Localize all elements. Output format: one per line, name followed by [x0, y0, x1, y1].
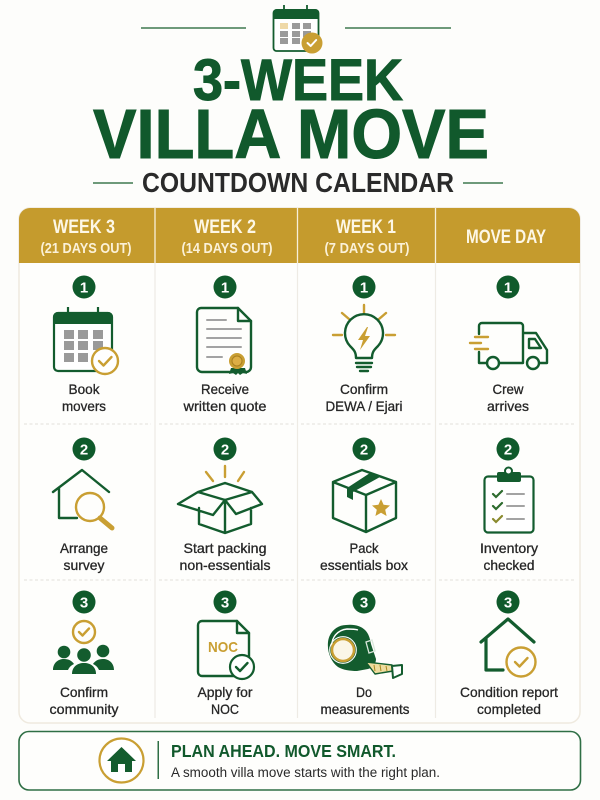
label — [320, 684, 410, 717]
label — [198, 684, 253, 717]
label: Start packing — [184, 540, 266, 556]
icon: tape measure — [328, 625, 402, 678]
task: start packing — [178, 438, 270, 573]
panel: calendar table — [19, 208, 580, 723]
task: do measurements — [320, 590, 410, 717]
heading: week 1: WEEK 1 — [336, 217, 396, 238]
task: inventory checked — [480, 438, 538, 573]
label: measurements — [320, 701, 410, 717]
label — [480, 540, 538, 573]
label: non-essentials — [180, 557, 270, 573]
icon: clipboard checklist — [484, 468, 534, 532]
task: start packing: 2 — [221, 442, 229, 458]
heading: week 1: (7 DAYS OUT) — [324, 240, 410, 257]
label: Condition report — [460, 684, 558, 700]
label: Arrange — [60, 540, 108, 556]
icon: light bulb — [333, 305, 395, 371]
label: essentials box — [320, 557, 408, 573]
icon: NOC document: NOC — [208, 639, 238, 656]
label: movers — [62, 398, 106, 414]
icon: document with seal — [197, 308, 251, 375]
task: arrange survey: 2 — [80, 442, 88, 458]
label: community — [50, 701, 118, 717]
label: checked — [484, 557, 534, 573]
label: Crew — [492, 381, 524, 397]
task: apply for NOC: 3 — [221, 594, 229, 612]
title: VILLA MOVE: VILLA MOVE — [93, 95, 489, 173]
icon: community with check — [53, 621, 114, 674]
heading: week 3: WEEK 3 — [53, 217, 115, 238]
icon: house in gold circle — [100, 738, 144, 782]
task: inventory checked: 2 — [504, 442, 512, 458]
heading: week 3 — [40, 217, 132, 257]
label — [62, 381, 106, 414]
task: condition report completed — [460, 590, 558, 717]
task: book movers — [53, 276, 118, 414]
task: book movers: 1 — [80, 280, 88, 296]
heading: move day: MOVE DAY — [466, 227, 546, 248]
label — [487, 381, 529, 414]
title: 3-WEEK: 3-WEEK — [193, 48, 403, 113]
label — [60, 540, 108, 573]
label — [50, 684, 118, 717]
icon: sealed box with star — [333, 470, 396, 532]
subtitle: COUNTDOWN CALENDAR: COUNTDOWN CALENDAR — [142, 167, 454, 198]
divider — [158, 741, 159, 779]
task: pack essentials box: 2 — [360, 442, 368, 458]
label — [182, 381, 267, 414]
label: Confirm — [340, 381, 388, 397]
label: survey — [64, 557, 104, 573]
tagline: A smooth villa move starts with the right plan. — [171, 765, 440, 780]
icon: house with check — [481, 619, 536, 676]
heading: week 2: WEEK 2 — [194, 217, 256, 238]
label — [180, 540, 270, 573]
label: arrives — [487, 398, 529, 414]
task: do measurements: 3 — [360, 594, 368, 612]
task: pack essentials box — [320, 438, 408, 573]
heading: week 2: (14 DAYS OUT) — [182, 240, 272, 257]
task: confirm community — [50, 590, 118, 717]
icon: house with magnifier — [53, 470, 112, 528]
header ornament lines — [141, 27, 451, 29]
task: condition report completed: 3 — [504, 594, 512, 612]
label: Receive — [201, 381, 249, 397]
label: Do — [356, 684, 372, 700]
label: Confirm — [60, 684, 108, 700]
task: receive written quote — [182, 276, 267, 414]
panel: footer banner — [19, 732, 580, 790]
task: arrange survey — [53, 438, 112, 573]
icon: calendar with check — [53, 307, 118, 374]
icon: open box — [178, 466, 262, 533]
heading: week 2 — [182, 217, 272, 257]
task: apply for NOC — [198, 590, 254, 717]
label: Book — [68, 381, 100, 397]
label: DEWA / Ejari — [326, 398, 402, 414]
label — [460, 684, 558, 717]
heading: week 1 — [324, 217, 410, 257]
label: completed — [477, 701, 541, 717]
task: receive written quote: 1 — [221, 280, 229, 296]
label: Apply for — [198, 684, 253, 700]
label: NOC — [211, 701, 239, 717]
subtitle ornament lines — [93, 182, 503, 184]
label — [326, 381, 402, 414]
icon: title calendar — [273, 5, 322, 54]
task: crew arrives — [470, 276, 547, 414]
task: confirm community: 3 — [80, 594, 88, 612]
heading: week 3: (21 DAYS OUT) — [40, 240, 132, 257]
task: confirm DEWA / Ejari — [326, 276, 402, 414]
task: confirm DEWA / Ejari: 1 — [360, 280, 368, 296]
label: Inventory — [480, 540, 538, 556]
label — [320, 540, 408, 573]
heading: plan ahead: PLAN AHEAD. MOVE SMART. — [171, 741, 396, 761]
icon: moving truck — [470, 323, 547, 369]
label: written quote — [182, 398, 267, 414]
task: crew arrives: 1 — [504, 280, 512, 296]
label: Pack — [350, 540, 379, 556]
